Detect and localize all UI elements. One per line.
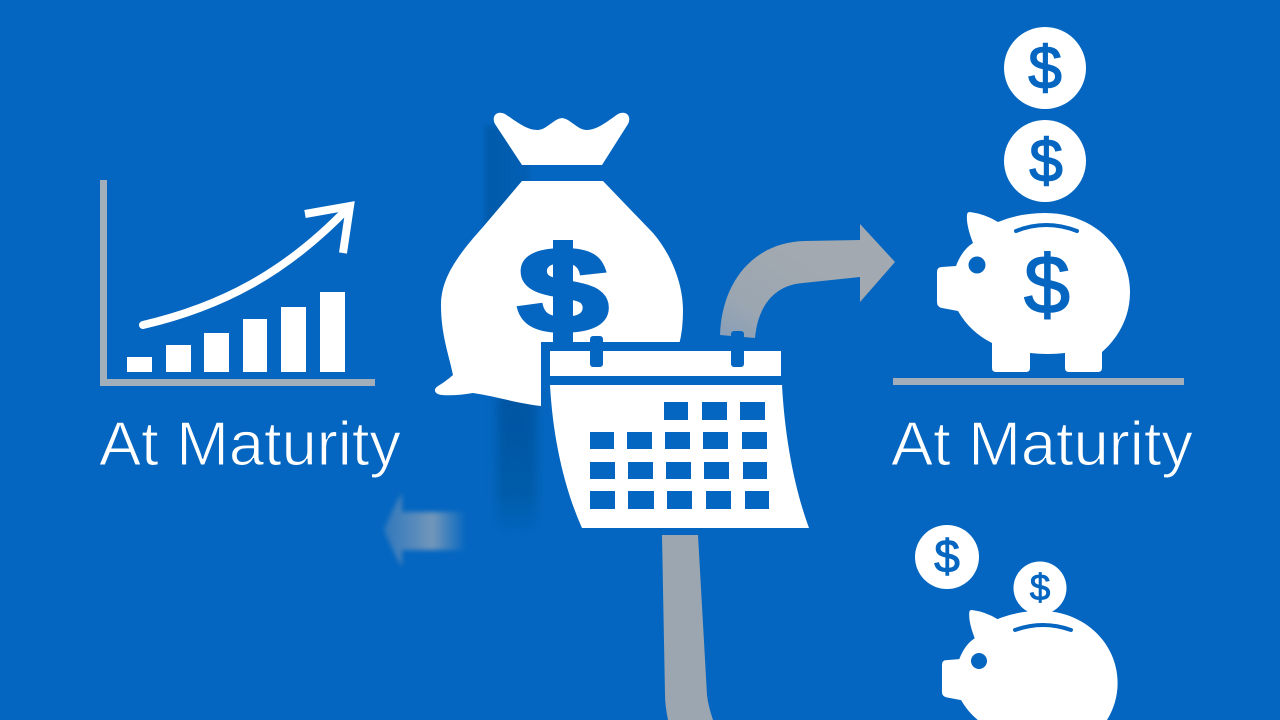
calendar page — [550, 385, 809, 528]
label: At Maturity: At Maturity — [891, 410, 1193, 479]
right panel: piggy bank with coins and label — [891, 27, 1193, 479]
left arrow — [384, 493, 466, 567]
calendar binding pins — [590, 331, 744, 367]
calendar outline — [541, 342, 790, 385]
bag body — [435, 181, 683, 406]
coin one — [1004, 27, 1086, 109]
icon: piggy bank: $ — [1024, 238, 1070, 331]
left panel: growth chart with label — [99, 180, 401, 479]
label: At Maturity: At Maturity — [99, 410, 401, 479]
icon: piggy bank — [937, 212, 1130, 372]
bag shadow: lower band — [497, 395, 537, 530]
bar chart — [127, 292, 345, 372]
icon: money bag — [435, 113, 683, 406]
bottom right: small piggy bank with coins — [915, 525, 1118, 720]
small coin right: $ — [1030, 567, 1050, 608]
calendar header — [550, 351, 781, 376]
chart axes — [100, 180, 375, 386]
bag shadow: upper band — [485, 126, 530, 300]
calendar date grid — [590, 402, 769, 509]
ground line — [893, 378, 1184, 385]
arrow: grey stem going down — [662, 535, 713, 720]
growth arrow — [143, 206, 350, 325]
small coin left: $ — [934, 530, 960, 582]
icon: small piggy bank — [942, 610, 1118, 720]
coin one: $ — [1028, 34, 1062, 101]
small coin right — [1014, 562, 1066, 614]
icon: calendar — [541, 331, 809, 528]
bag knot — [494, 113, 629, 165]
arrow: faded left arrow with shadow — [384, 126, 537, 567]
arrow: grey curved arrow to piggy bank — [720, 224, 895, 338]
coin two — [1004, 120, 1086, 202]
bag dollar sign: $ — [518, 223, 608, 358]
coin two: $ — [1029, 127, 1063, 194]
small coin left — [915, 525, 979, 589]
